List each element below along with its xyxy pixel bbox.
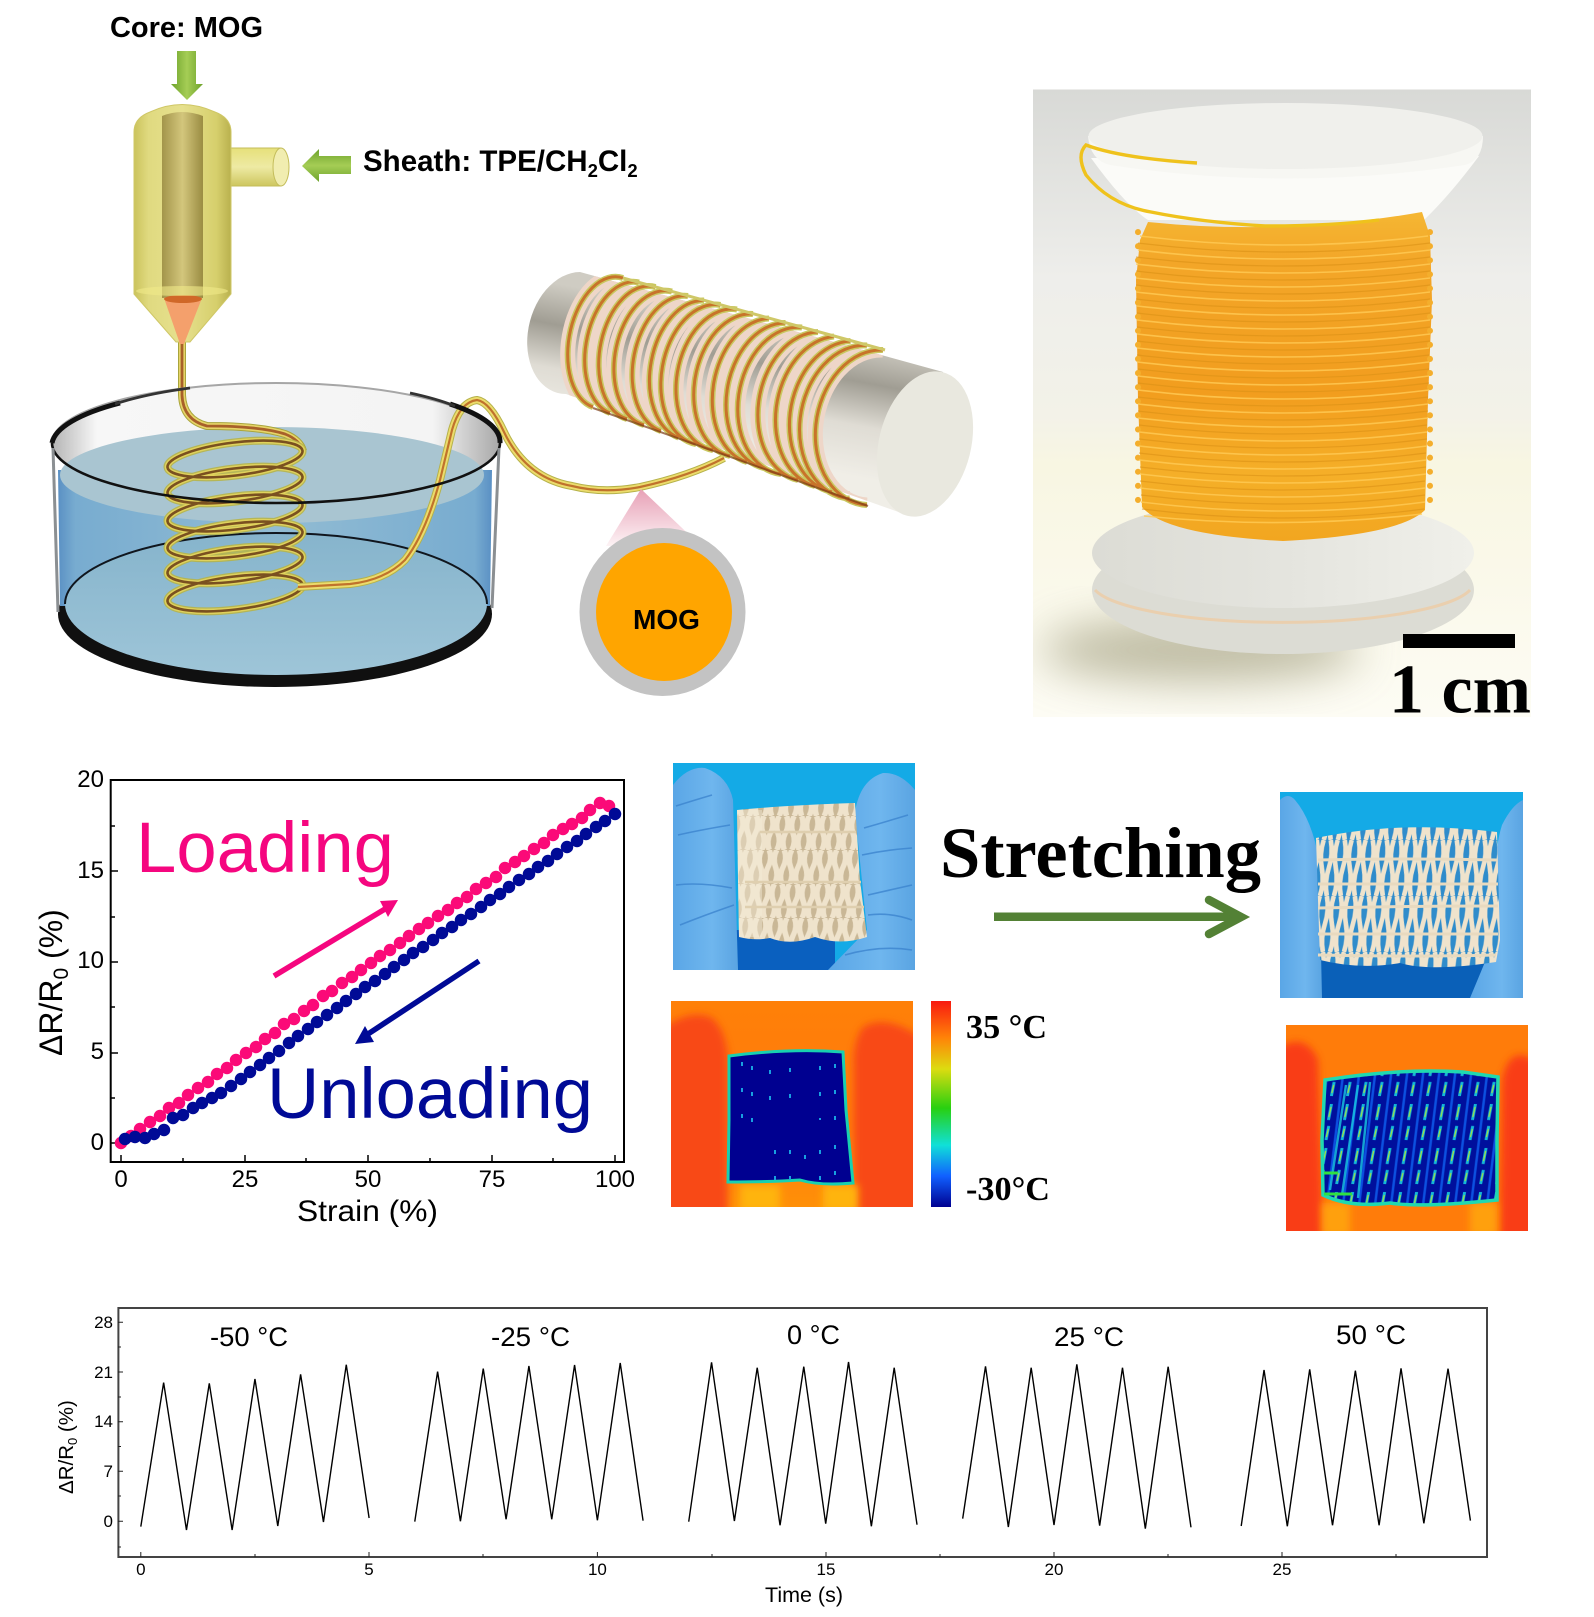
MOG core [596, 543, 732, 681]
unloading series [125, 814, 615, 1139]
loose fiber end [1081, 145, 1379, 226]
colour scale minimum: -30°C [966, 1171, 1050, 1208]
x axis title: Strain (%) [297, 1195, 438, 1228]
callout cone [606, 489, 701, 546]
x axis tick labels: 25 [1273, 1560, 1291, 1579]
knitted fabric [737, 803, 867, 942]
floor back edge [65, 533, 487, 604]
photo: fabric before stretching [673, 763, 915, 970]
arrow: unloading direction [355, 961, 479, 1044]
y axis tick labels: 21 [94, 1363, 113, 1382]
lid rim band [1088, 136, 1483, 158]
dish interior above water [52, 383, 500, 503]
thermal background [1286, 1025, 1528, 1231]
winding cylinder with wound fiber [527, 272, 988, 527]
core cone [164, 295, 202, 344]
wound fiber rings [568, 277, 885, 506]
x axis tick labels: 15 [817, 1560, 835, 1579]
bottom flange [1092, 570, 1474, 654]
photo background [1033, 90, 1531, 717]
dish rim and walls [52, 383, 500, 612]
floor shadow [1040, 618, 1360, 682]
temperature labels: -25 °C [491, 1322, 570, 1352]
thermal image: before stretching [671, 1001, 913, 1207]
y axis title: 0 [50, 968, 73, 980]
coiled fiber in bath [165, 338, 724, 618]
fabric cross yarns [745, 832, 864, 907]
warmer gaps in fabric [742, 1062, 835, 1180]
x axis tick labels: 0 [114, 1166, 128, 1193]
glove wrinkles [676, 795, 912, 955]
warm patches below fabric [740, 1185, 858, 1212]
wound orange fiber [1136, 212, 1432, 541]
plot frame [111, 780, 624, 1162]
arrow: stretching [994, 900, 1241, 934]
lighter left side of fabric [737, 810, 762, 937]
right glove [828, 773, 915, 970]
warm fingers [671, 1011, 732, 1207]
y axis tick labels: 7 [104, 1462, 113, 1481]
y axis tick labels: 20 [77, 766, 104, 793]
axis ticks [111, 826, 615, 1162]
y axis tick labels: 14 [94, 1412, 113, 1431]
side inlet tube [226, 148, 281, 186]
dark backdrop below fabric [735, 930, 835, 970]
lower liquid meniscus [136, 286, 228, 296]
temperature labels: 0 °C [787, 1320, 840, 1350]
temperature labels [210, 1320, 1406, 1352]
arrow: sheath inlet [302, 149, 351, 182]
fiber wraps [1136, 236, 1430, 523]
backdrop [673, 763, 915, 970]
temperature labels: 25 °C [1054, 1322, 1124, 1352]
dish floor [65, 533, 487, 675]
sheath ring [580, 528, 746, 696]
x axis tick labels: 75 [479, 1166, 505, 1193]
y axis tick labels: 0 [91, 1129, 104, 1156]
label: sheath TPE/CH2Cl2: Sheath: TPE/CH [363, 145, 588, 178]
x axis tick labels: 0 [136, 1560, 146, 1579]
x axis tick labels: 25 [232, 1166, 258, 1193]
dish base ring [58, 541, 492, 687]
loading series [121, 803, 609, 1143]
x axis tick labels: 50 [355, 1166, 381, 1193]
line chart: cycling at temperatures [55, 1308, 1487, 1607]
warm patches below fabric [1322, 1203, 1497, 1236]
cross yarn highlights [1324, 1173, 1352, 1194]
y axis title: ΔR/R [33, 980, 69, 1056]
x axis title: Time (s) [765, 1584, 843, 1607]
inner core tube [162, 112, 203, 298]
x axis tick labels [136, 1560, 1291, 1579]
arrow: loading direction [274, 900, 398, 976]
temperature labels: -50 °C [210, 1322, 288, 1352]
y axis tick labels: 5 [91, 1038, 104, 1065]
right glove [1470, 800, 1523, 998]
water surface [60, 427, 484, 523]
temperature labels: 50 °C [1336, 1320, 1406, 1350]
axis ticks [118, 1322, 1396, 1557]
line chart: resistance vs strain [33, 766, 635, 1228]
flange underside [1091, 156, 1479, 220]
cylinder body [527, 272, 943, 515]
scale label: 1 cm [1389, 652, 1531, 728]
y axis title: 0 [65, 1438, 80, 1445]
y axis tick labels [94, 1313, 113, 1531]
warm fingers [1275, 1042, 1323, 1240]
y axis title: ΔR/R [55, 1445, 78, 1494]
left glove [673, 768, 738, 970]
label: unloading: Unloading [267, 1054, 593, 1134]
photo: fabric after stretching [1280, 792, 1523, 998]
arrow: core inlet [171, 51, 203, 100]
scale bar [1403, 634, 1515, 648]
backdrop [1280, 792, 1523, 848]
cold fabric [728, 1051, 853, 1184]
fabric cross yarns [1318, 859, 1498, 956]
x axis tick labels: 5 [364, 1560, 374, 1579]
cyan yarns on left of fabric [1330, 1082, 1370, 1198]
title: stretching: Stretching [940, 813, 1261, 893]
nozzle body [134, 104, 231, 342]
label: sheath TPE/CH2Cl2: Cl [598, 145, 627, 178]
callout: fiber cross section [580, 489, 746, 696]
label: sheath TPE/CH2Cl2: 2 [627, 160, 638, 181]
y axis tick labels: 10 [77, 947, 104, 974]
dark backdrop below fabric [1321, 960, 1484, 998]
y axis title: (%) [33, 909, 69, 968]
top flange [1088, 103, 1482, 136]
x axis tick labels: 100 [595, 1166, 635, 1193]
cylinder end cap [862, 361, 988, 527]
fiber wrap ridges at spool edge [1138, 232, 1430, 500]
cyclic resistance traces [141, 1362, 1470, 1530]
y axis tick labels: 0 [104, 1512, 113, 1531]
stretched knitted fabric [1316, 827, 1500, 967]
cold stretched fabric [1322, 1071, 1498, 1205]
y axis tick labels: 28 [94, 1313, 113, 1332]
y axis title: (%) [55, 1400, 78, 1438]
label: core MOG: Core: MOG [110, 12, 263, 44]
water body [58, 470, 492, 606]
photo: fiber wound on spool [1033, 90, 1531, 728]
colour scale maximum: 35 °C [966, 1009, 1047, 1046]
label: MOG: MOG [633, 604, 700, 635]
syringe nozzle [134, 104, 289, 344]
y axis tick labels [77, 766, 104, 1156]
coagulation bath with coiled fiber [52, 338, 724, 687]
label: sheath TPE/CH2Cl2: 2 [588, 160, 598, 181]
x axis tick labels [114, 1166, 635, 1193]
thermal image: after stretching [1286, 1025, 1528, 1231]
y axis tick labels: 15 [77, 857, 104, 884]
left glove [1280, 796, 1322, 998]
x axis tick labels: 10 [588, 1560, 607, 1579]
x axis tick labels: 20 [1045, 1560, 1063, 1579]
label: loading: Loading [136, 808, 394, 888]
plot frame [118, 1308, 1487, 1557]
thermal background [671, 1001, 913, 1207]
colour scale bar [931, 1001, 951, 1207]
